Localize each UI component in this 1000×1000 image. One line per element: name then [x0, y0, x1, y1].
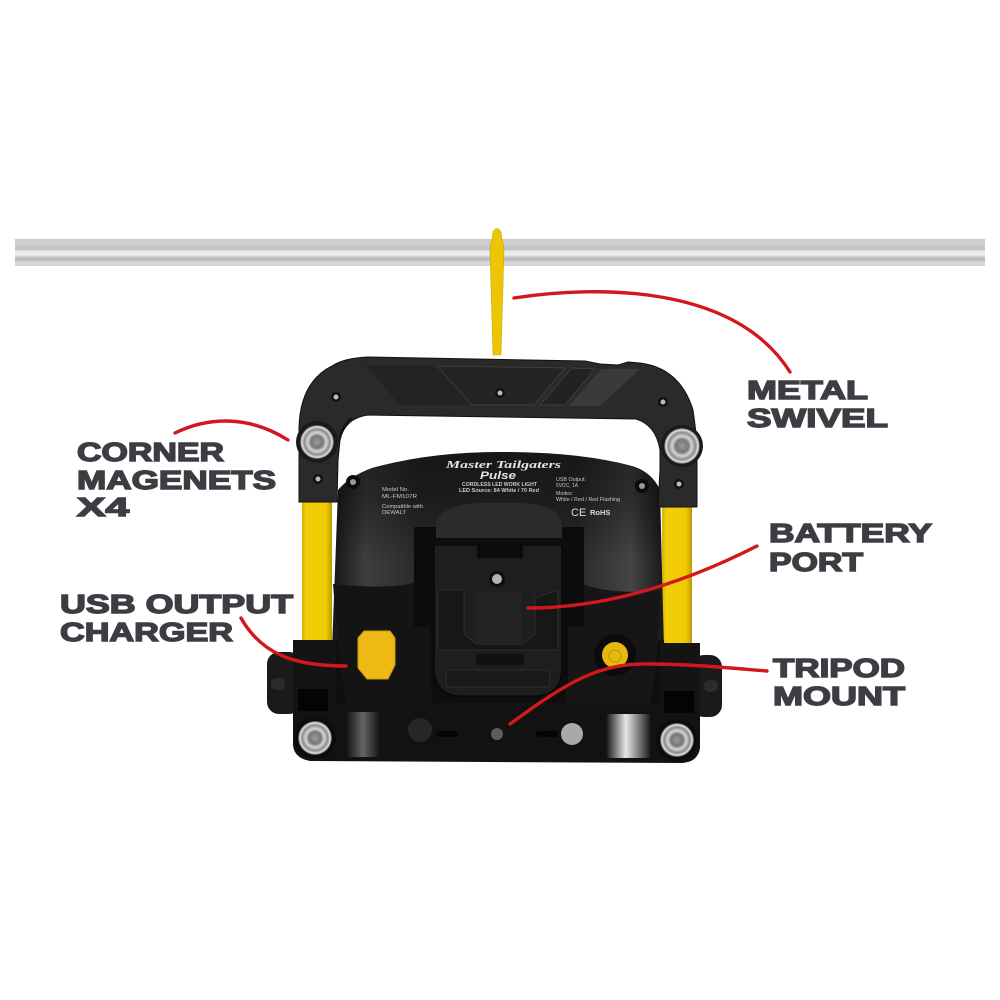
- power button: [594, 634, 636, 676]
- label text on body: CE: [571, 507, 586, 519]
- label: USB output charger: [60, 589, 293, 647]
- label: corner magnets: MAGENETS: [77, 465, 276, 495]
- label text on body: 5VDC, 1A: [556, 483, 578, 489]
- label: battery port: [769, 518, 932, 577]
- label text on body: DEWALT: [382, 510, 407, 516]
- yellow legs: [302, 495, 692, 646]
- label text on body: Modes:: [556, 491, 573, 497]
- label: corner magnets: [77, 437, 276, 522]
- label text on body: [382, 459, 620, 519]
- label: tripod mount: MOUNT: [773, 681, 905, 711]
- metal swivel hook: [490, 228, 504, 355]
- label: metal swivel: [747, 375, 888, 433]
- knobs: [267, 652, 722, 717]
- left pod: [333, 582, 432, 705]
- label: USB output charger: CHARGER: [60, 617, 233, 647]
- label: USB output charger: USB OUTPUT: [60, 589, 293, 619]
- label: metal swivel: SWIVEL: [747, 403, 888, 433]
- label: tripod mount: TRIPOD: [773, 653, 905, 683]
- USB output charger cover: [358, 631, 395, 679]
- battery port: [414, 503, 584, 703]
- right pod: [566, 582, 660, 705]
- label text on body: ML-FM107R: [382, 494, 417, 500]
- label text on body: White / Red / Red Flashing: [556, 497, 620, 503]
- label text on body: Master Tailgaters: [445, 459, 561, 471]
- label text on body: USB Output:: [556, 477, 586, 483]
- base with mounts: [293, 640, 700, 763]
- label text on body: LED Source: 84 White / 70 Red: [459, 488, 539, 494]
- work light body: [332, 452, 664, 712]
- label text on body: Model No.: [382, 487, 409, 493]
- label text on body: CORDLESS LED WORK LIGHT: [462, 482, 538, 488]
- corner magnets: [294, 421, 703, 761]
- label: corner magnets: CORNER: [77, 437, 224, 467]
- label: battery port: PORT: [769, 547, 863, 577]
- label text on body: Compatible with: [382, 504, 423, 510]
- carry handle: [299, 357, 697, 507]
- callout lines: [175, 292, 790, 724]
- label: battery port: BATTERY: [769, 518, 932, 548]
- label text on body: Pulse: [480, 470, 516, 482]
- label text on body: RoHS: [590, 508, 610, 517]
- label: corner magnets: X4: [77, 492, 130, 522]
- label: metal swivel: METAL: [747, 375, 868, 405]
- label: tripod mount: [773, 653, 905, 711]
- metal rail: [15, 239, 985, 266]
